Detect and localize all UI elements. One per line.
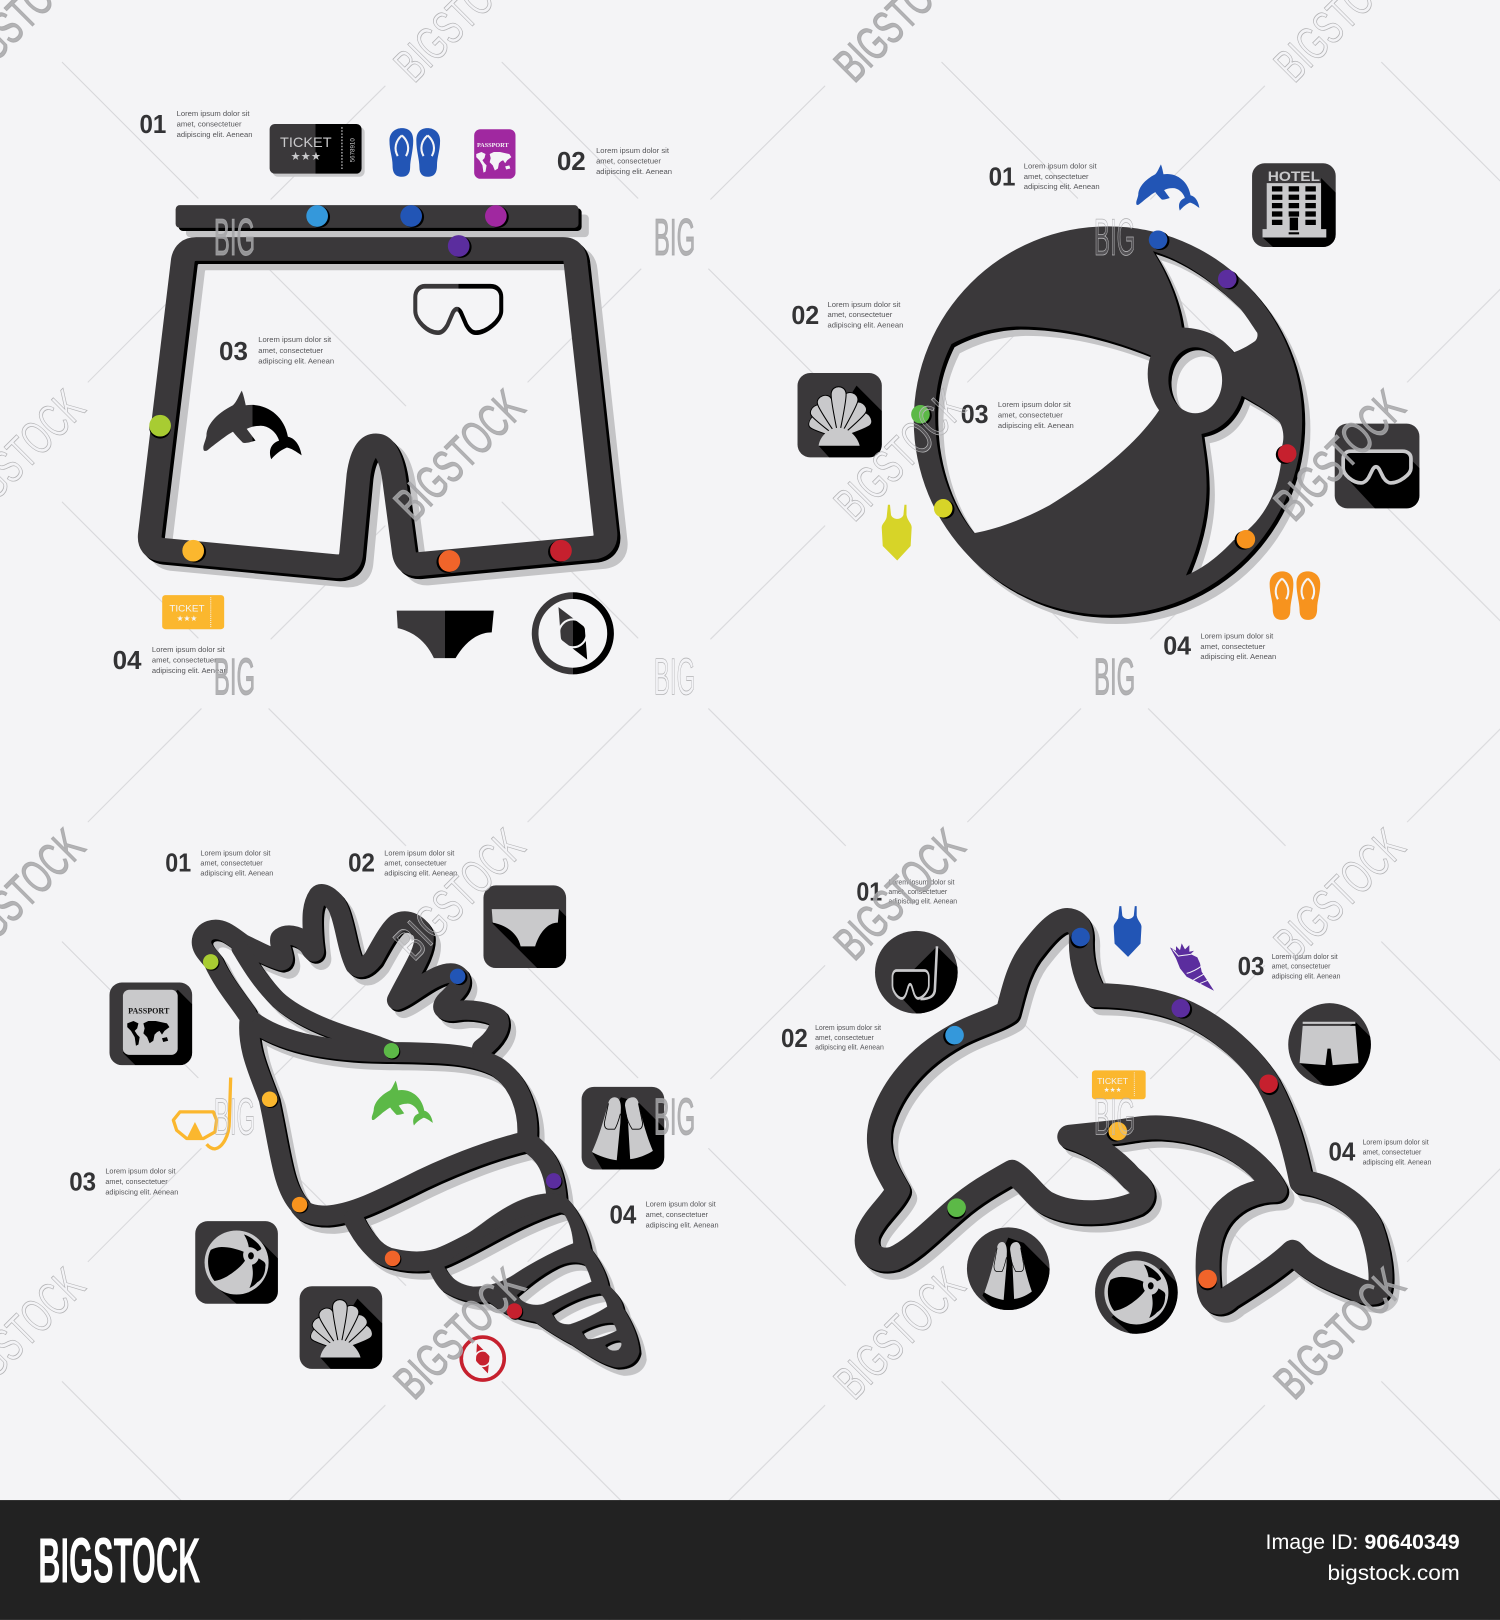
label 03: 03 [961, 401, 989, 429]
text: BIG [1094, 647, 1135, 705]
label 02: adipiscing elit. Aenean [827, 321, 903, 330]
label 01: amet, consectetuer [1024, 172, 1089, 181]
icon: yellow ticket: TICKET [1097, 1077, 1128, 1086]
dot: light blue [306, 205, 330, 228]
label 04 [610, 1200, 719, 1230]
watermarks: BIGSTOCK: BIGSTOCK [384, 819, 535, 970]
label 01 [139, 109, 253, 139]
icon: shell tile [300, 1286, 382, 1369]
dot: navy [1070, 928, 1090, 948]
dot: lime [203, 954, 220, 971]
label 02: amet, consectetuer [384, 858, 447, 867]
icon: yellow ticket: ★★★ [177, 614, 197, 623]
image id: Image ID: 90640349 [1265, 1531, 1460, 1554]
watermarks: BIG: BIG [654, 1087, 695, 1145]
label 03: Lorem ipsum dolor sit [1272, 954, 1338, 961]
label 02: amet, consectetuer [827, 310, 893, 319]
icon: passport tile: PASSPORT [128, 1007, 170, 1016]
label 04: adipiscing elit. Aenean [152, 666, 228, 675]
label 03: 03 [1238, 953, 1264, 981]
label 01: adipiscing elit. Aenean [200, 868, 273, 877]
label 01 [856, 878, 957, 906]
icon: dark ticket [270, 124, 365, 177]
label 04: Lorem ipsum dolor sit [1200, 632, 1274, 641]
icon: dark ticket: ★★★ [291, 149, 321, 163]
watermarks: BIG: BIG [214, 1087, 255, 1145]
icon: diving mask [415, 286, 501, 333]
label 02 [557, 146, 672, 176]
label 04: Lorem ipsum dolor sit [152, 645, 226, 654]
text: BIG [1094, 1087, 1135, 1145]
label 04 [1329, 1139, 1431, 1167]
dot: navy [1149, 230, 1169, 250]
label 04: adipiscing elit. Aenean [1363, 1159, 1431, 1166]
dot: orange [436, 550, 460, 573]
label 02: 02 [348, 849, 375, 877]
panel: swim shorts [113, 109, 672, 675]
beach ball shape [914, 226, 1310, 624]
dot: violet [1218, 270, 1239, 289]
icon: passport tile [110, 983, 192, 1065]
icon: yellow ticket: ★★★ [1104, 1086, 1122, 1094]
label 01: amet, consectetuer [177, 119, 242, 128]
watermarks: BIGSTOCK: BIGSTOCK [1265, 1258, 1415, 1409]
watermarks: BIGSTOCK: BIGSTOCK [825, 1258, 975, 1409]
panel: conch shell [69, 848, 719, 1380]
watermarks: BIG [214, 208, 1135, 1145]
icon: snorkel circle [875, 930, 958, 1014]
dot: orange [1198, 1270, 1217, 1290]
label 04: amet, consectetuer [152, 655, 217, 664]
label 01: adipiscing elit. Aenean [888, 898, 957, 905]
label 02: adipiscing elit. Aenean [384, 868, 457, 877]
label 03 [219, 335, 334, 366]
icon: compass [535, 596, 611, 671]
icon: briefs tile [483, 885, 566, 968]
icon: yellow swimsuit [882, 505, 912, 561]
dolphin outline [867, 920, 1388, 1311]
dot: yellow [262, 1092, 278, 1108]
conch shell outline [201, 894, 647, 1376]
label 01: Lorem ipsum dolor sit [888, 879, 955, 886]
label 03: adipiscing elit. Aenean [1272, 973, 1341, 980]
label 04: amet, consectetuer [646, 1210, 709, 1219]
label 03: 03 [219, 338, 248, 366]
icon: shell tile [798, 373, 882, 457]
label 02: 02 [781, 1025, 808, 1053]
label 03: Lorem ipsum dolor sit [258, 335, 332, 344]
label 04: amet, consectetuer [1200, 642, 1266, 651]
label 03 [961, 400, 1074, 430]
swim shorts outline [150, 205, 616, 576]
label 02: amet, consectetuer [596, 157, 661, 166]
label 03: amet, consectetuer [258, 346, 324, 355]
site url: bigstock.com [1327, 1560, 1460, 1585]
label 03: amet, consectetuer [105, 1177, 168, 1186]
icon: hotel tile [1252, 163, 1336, 247]
dot: lime [149, 415, 171, 439]
icon: blue flip-flops [389, 128, 440, 177]
label 03: 03 [69, 1169, 96, 1197]
watermarks: BIGSTOCK: BIGSTOCK [825, 819, 975, 970]
dot: light blue [943, 1026, 964, 1046]
label 03: Lorem ipsum dolor sit [105, 1167, 175, 1176]
label 02 [781, 1025, 884, 1053]
watermarks: BIGSTOCK: BIGSTOCK [825, 380, 975, 531]
dot: yellow-green [934, 499, 955, 519]
icon: ball tile [195, 1221, 278, 1304]
label 01: Lorem ipsum dolor sit [200, 848, 270, 857]
label 01: Lorem ipsum dolor sit [177, 109, 250, 118]
label 03 [69, 1167, 178, 1197]
icon: fins tile [582, 1087, 664, 1170]
label 02: 02 [791, 302, 819, 330]
panel: dolphin [781, 878, 1431, 1339]
footer bar [0, 1500, 1500, 1620]
icon: violet conch [1170, 943, 1214, 991]
label 04 [113, 645, 228, 675]
label 02: Lorem ipsum dolor sit [384, 848, 454, 857]
dot: purple [485, 205, 509, 228]
watermarks: BIGSTOCK: BIGSTOCK [1265, 819, 1415, 970]
label 03: adipiscing elit. Aenean [105, 1187, 178, 1196]
label 02: Lorem ipsum dolor sit [596, 146, 670, 155]
dot: yellow [1106, 1122, 1127, 1142]
label 03: adipiscing elit. Aenean [258, 357, 334, 366]
label 04: adipiscing elit. Aenean [1200, 652, 1276, 661]
icon: purple passport [474, 129, 515, 179]
icon: dark ticket: TICKET [280, 134, 332, 150]
dot: green [911, 405, 932, 425]
label 02: Lorem ipsum dolor sit [827, 300, 901, 309]
dot: green [947, 1198, 966, 1219]
icon: yellow snorkel mask [173, 1078, 231, 1149]
watermarks: BIG: BIG [654, 647, 695, 705]
label 03: Lorem ipsum dolor sit [998, 400, 1072, 409]
watermarks: BIG: BIG [214, 208, 255, 266]
dot: red [507, 1303, 523, 1320]
footer bar: BIGSTOCK [38, 1525, 200, 1597]
icon: yellow ticket [162, 595, 224, 629]
label 01: amet, consectetuer [888, 889, 948, 896]
icon: mask tile [1335, 424, 1419, 508]
label 01 [165, 848, 273, 877]
icon: yellow ticket: TICKET [169, 604, 205, 614]
icon: ball circle [1095, 1251, 1178, 1334]
icon: swim briefs [397, 611, 494, 658]
icon: yellow ticket [1092, 1070, 1146, 1099]
dot: navy [450, 969, 467, 985]
icon: shorts circle [1288, 1003, 1371, 1086]
icon: green dolphin [372, 1081, 433, 1125]
dot: violet [448, 235, 472, 258]
icon: dark ticket: 5678910 [349, 138, 356, 162]
label 01 [989, 161, 1100, 192]
icon: purple passport: PASSPORT [477, 142, 509, 149]
label 01: adipiscing elit. Aenean [1024, 182, 1100, 191]
label 01: adipiscing elit. Aenean [177, 130, 253, 139]
label 04: 04 [1163, 633, 1192, 661]
label 04: amet, consectetuer [1363, 1150, 1422, 1157]
label 03: amet, consectetuer [998, 410, 1063, 419]
label 04: adipiscing elit. Aenean [646, 1220, 719, 1229]
label 02: Lorem ipsum dolor sit [815, 1025, 881, 1032]
label 04: 04 [113, 647, 142, 675]
dot: red [1276, 444, 1296, 464]
label 03: amet, consectetuer [1272, 964, 1331, 971]
dot: violet [1171, 999, 1192, 1019]
label 01: amet, consectetuer [200, 858, 263, 867]
label 04: Lorem ipsum dolor sit [1363, 1140, 1429, 1147]
icon: orange flip-flops [1270, 571, 1320, 620]
label 03: adipiscing elit. Aenean [998, 421, 1074, 430]
dot: orange [1235, 530, 1255, 550]
dot: navy [400, 205, 424, 228]
dot: violet [546, 1173, 562, 1190]
label 01: 01 [856, 878, 882, 906]
text: BIG [1094, 208, 1135, 266]
label 02: adipiscing elit. Aenean [596, 167, 672, 176]
dot: red [548, 540, 572, 563]
watermarks: BIG: BIG [654, 208, 695, 266]
label 02 [348, 848, 457, 877]
watermarks: BIGSTOCK: BIGSTOCK [1265, 380, 1415, 531]
label 04: Lorem ipsum dolor sit [646, 1200, 716, 1209]
icon: fins circle [966, 1227, 1050, 1310]
label 01: 01 [989, 164, 1015, 192]
label 04 [1163, 632, 1276, 661]
icon: blue dolphin [1136, 164, 1199, 211]
label 01: Lorem ipsum dolor sit [1024, 161, 1098, 170]
icon: navy swimsuit [1114, 906, 1141, 957]
dot: light orange [292, 1197, 308, 1213]
panel: beach ball [791, 161, 1419, 661]
dot: red [1259, 1074, 1279, 1095]
icon: hotel tile: HOTEL [1268, 169, 1320, 184]
watermarks: BIG: BIG [214, 647, 255, 705]
label 01: 01 [139, 111, 166, 139]
label 01: 01 [165, 849, 191, 877]
icon: dolphin [203, 391, 302, 459]
dot: green [384, 1043, 400, 1059]
label 03 [1238, 953, 1341, 981]
label 02: 02 [557, 148, 586, 176]
watermarks: BIGSTOCK: BIGSTOCK [384, 1258, 535, 1409]
dot: yellow [182, 540, 206, 563]
label 02: adipiscing elit. Aenean [815, 1045, 884, 1052]
watermarks: BIGSTOCK: BIGSTOCK [384, 380, 535, 531]
label 04: 04 [610, 1202, 637, 1230]
label 02: amet, consectetuer [815, 1035, 875, 1042]
label 04: 04 [1329, 1139, 1356, 1167]
icon: red compass [461, 1337, 504, 1380]
label 02 [791, 300, 903, 330]
dot: orange [385, 1251, 401, 1267]
